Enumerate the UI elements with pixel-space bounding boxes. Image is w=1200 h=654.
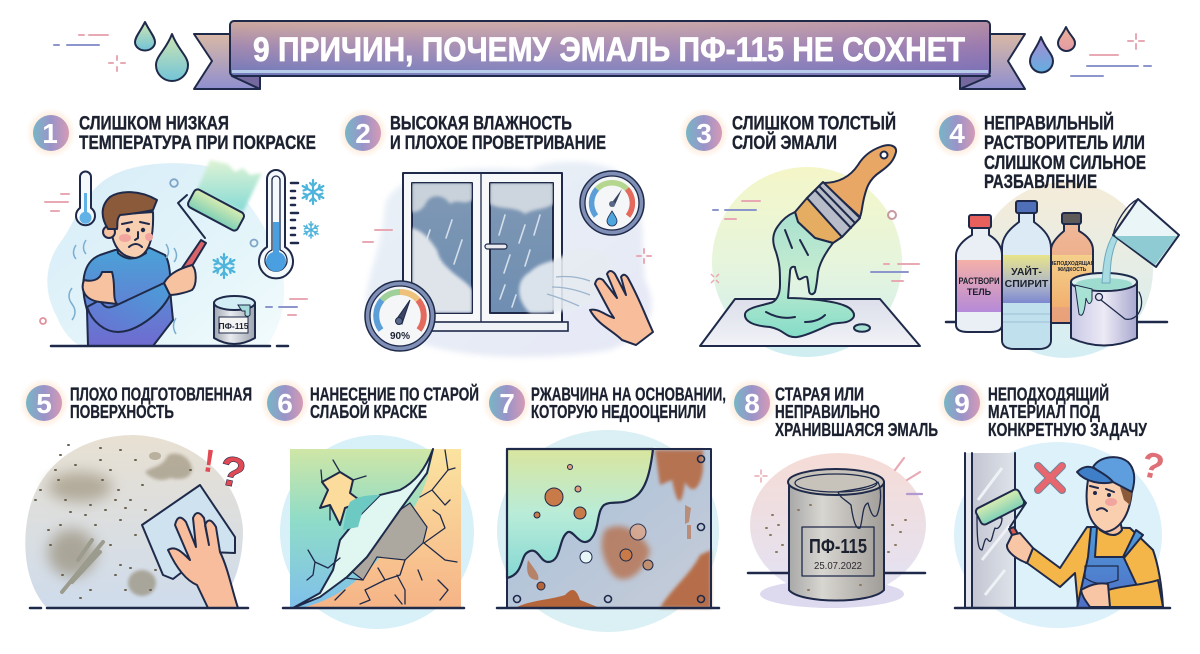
paint can ПФ-115: ПФ-115: [219, 321, 249, 331]
torso: [83, 248, 173, 346]
shadow ellipse: [760, 580, 904, 608]
hand wiping: [168, 513, 238, 608]
window handle: [485, 244, 507, 249]
paint can ПФ-115 old: 25.07.2022: [814, 561, 862, 572]
brush handle: [823, 145, 896, 217]
reason 8: [727, 378, 938, 608]
paint can ПФ-115 old: ПФ-115: [809, 536, 867, 558]
heading 2: [390, 114, 606, 154]
red cross: [1038, 466, 1062, 490]
number badge 4: 4: [949, 118, 965, 149]
paint smear: [977, 516, 1002, 550]
reason 6: [260, 378, 479, 629]
hygrometer 90%: 90%: [390, 331, 410, 342]
question mark: ?: [215, 446, 250, 497]
heading 8: ХРАНИВШАЯСЯ ЭМАЛЬ: [775, 420, 938, 440]
steam cloud: [519, 249, 611, 313]
background circle 3: [712, 167, 902, 357]
crossed arm: [87, 283, 170, 332]
peeled curl: [293, 449, 433, 608]
banner right tail: [960, 34, 1025, 89]
heading 7: РЖАВЧИНА НА ОСНОВАНИИ,: [531, 384, 726, 404]
exposed old paint: [300, 449, 461, 608]
number badge 7: 7: [499, 388, 515, 419]
reason 3: [679, 108, 920, 357]
decorative dashes: [711, 201, 919, 283]
title text: 9 ПРИЧИН, ПОЧЕМУ ЭМАЛЬ ПФ-115 НЕ СОХНЕТ: [253, 31, 965, 69]
worker hand on belly: [1081, 583, 1110, 607]
reason 5: [19, 378, 252, 608]
number badge 2: [338, 108, 388, 158]
decoration: left drops and dashes: [54, 22, 188, 81]
reason 7: [482, 378, 726, 632]
bottle: неподходящая жидкость: [1050, 213, 1095, 323]
ground line: [955, 607, 1170, 609]
hand: [590, 271, 653, 345]
background blob 1: [47, 163, 284, 346]
decoration dashes: [363, 230, 392, 242]
heading 9: КОНКРЕТНУЮ ЗАДАЧУ: [988, 420, 1148, 440]
window frame: [965, 453, 1015, 608]
painted panel: [290, 449, 461, 608]
reason 9: [937, 378, 1170, 628]
reason 4: [932, 108, 1179, 358]
rag: [142, 485, 235, 579]
number badge 6: 6: [277, 388, 293, 419]
heading 7: КОТОРУЮ НЕДООЦЕНИЛИ: [531, 402, 706, 422]
heading 5: ПЛОХО ПОДГОТОВЛЕННАЯ: [70, 384, 252, 404]
painted strip: [197, 160, 262, 212]
rust bubbles: [534, 464, 653, 590]
icon: large thermometer: [259, 170, 298, 278]
rust speckles: [766, 505, 906, 590]
paint flow and puddle: [745, 212, 870, 337]
hand on shoulder: [83, 272, 117, 304]
flake hole and cracks: [307, 450, 457, 604]
pouring stream: [1102, 235, 1118, 283]
beaker: [1113, 199, 1179, 267]
paint pail: [1071, 273, 1142, 346]
bottle: растворитель: ТЕЛЬ: [967, 287, 992, 297]
background cloud blob: [366, 162, 652, 357]
banner left tail: [194, 34, 260, 89]
title banner: [194, 21, 1025, 89]
background circle 7: [497, 430, 719, 632]
ferrule: [807, 182, 860, 237]
heading 8: НЕПРАВИЛЬНО: [775, 402, 880, 422]
paint can ПФ-115 old: [788, 469, 884, 600]
bottle: уайт-спирит: СПИРИТ: [1005, 278, 1049, 290]
number badge 1: [26, 108, 76, 158]
gauge with drop: [580, 171, 644, 235]
ground line: [283, 607, 464, 609]
heading 8: [775, 384, 938, 440]
rusty metal panel: [507, 449, 711, 608]
number badge 2: 2: [355, 118, 371, 149]
heading 1: [79, 114, 316, 154]
number badge 3: 3: [696, 118, 712, 149]
heading 4: РАСТВОРИТЕЛЬ ИЛИ: [984, 133, 1145, 154]
question mark: [201, 442, 250, 497]
rivets: [514, 456, 704, 602]
ground line: [497, 607, 719, 609]
bottle: уайт-спирит: УАЙТ-: [1011, 265, 1042, 278]
banner left fold: [232, 76, 260, 89]
question mark: ?: [1138, 443, 1168, 488]
paint brush: [795, 145, 896, 243]
bottle: уайт-спирит: [1002, 201, 1051, 349]
hair: [103, 192, 157, 229]
reason 2: [338, 108, 653, 357]
decorative dashes: [45, 194, 69, 202]
heading 7: [531, 384, 726, 422]
background circle 4: [977, 182, 1153, 358]
background circle 6: [280, 435, 474, 629]
heading 8: СТАРАЯ ИЛИ: [775, 384, 864, 404]
heading 6: [310, 384, 479, 422]
heading 2: ВЫСОКАЯ ВЛАЖНОСТЬ: [390, 114, 572, 134]
person shivering: [69, 192, 196, 346]
rust patches: [515, 450, 711, 608]
dirt stains: [35, 445, 192, 598]
heading 5: ПОВЕРХНОСТЬ: [70, 402, 174, 422]
panel outline: [507, 449, 711, 608]
heading 1: ТЕМПЕРАТУРА ПРИ ПОКРАСКЕ: [79, 133, 316, 154]
heading 6: СЛАБОЙ КРАСКЕ: [310, 401, 427, 422]
can label: [802, 527, 874, 576]
dirty wall circle: [25, 435, 243, 608]
forearm: [1105, 580, 1163, 607]
number badge 4: [932, 108, 982, 158]
rain: [424, 215, 540, 307]
heading 4: СЛИШКОМ СИЛЬНОЕ: [984, 153, 1146, 174]
bristles: [795, 198, 842, 243]
decoration: right drops and dashes: [1030, 27, 1151, 76]
icon: snowflakes: [214, 180, 323, 278]
worker cap: [1093, 457, 1134, 492]
bottle: растворитель: РАСТВОРИ: [958, 276, 1000, 286]
heading 4: НЕПРАВИЛЬНЫЙ: [984, 112, 1114, 134]
paint can ПФ-115: [214, 296, 255, 344]
heading 5: [70, 384, 252, 422]
heading 2: И ПЛОХОЕ ПРОВЕТРИВАНИЕ: [390, 133, 606, 154]
number badge 9: [937, 378, 987, 428]
background ellipse 9: [954, 442, 1162, 628]
number badge 6: [260, 378, 310, 428]
neck and head: [117, 240, 146, 258]
worker neck: [1097, 520, 1122, 535]
ground line: [946, 321, 1167, 323]
paint roller: [178, 188, 245, 271]
heading 3: [732, 112, 896, 154]
number badge 5: 5: [36, 388, 52, 419]
roller: [975, 488, 1032, 563]
warning marks: [755, 458, 922, 494]
bottle: растворитель: [956, 215, 1002, 332]
icon: small thermometer: [76, 172, 95, 225]
reason 1: [26, 108, 323, 346]
heading 3: СЛОЙ ЭМАЛИ: [732, 132, 837, 154]
worker: [1007, 457, 1163, 608]
heading 9: НЕПОДХОДЯЩИЙ: [988, 384, 1109, 404]
number badge 8: 8: [744, 388, 760, 419]
heading 9: МАТЕРИАЛ ПОД: [988, 402, 1100, 422]
ground line: [51, 345, 288, 347]
shirt and arm: [1027, 527, 1163, 607]
ground line: [30, 607, 248, 609]
number badge 9: 9: [954, 388, 970, 419]
dripping old paint: [838, 482, 881, 528]
number badge 8: [727, 378, 777, 428]
banner ribbon: [230, 21, 990, 76]
heading 1: СЛИШКОМ НИЗКАЯ: [79, 114, 229, 134]
table sheet: [700, 299, 920, 346]
hygrometer 90%: [365, 281, 435, 351]
banner right fold: [960, 76, 990, 89]
heading 9: [988, 384, 1148, 440]
hand on roller: [164, 265, 196, 295]
heading 4: РАЗБАВЛЕНИЕ: [984, 172, 1097, 193]
storm clouds: [412, 183, 472, 313]
heading 3: СЛИШКОМ ТОЛСТЫЙ: [732, 112, 896, 134]
number badge 3: [679, 108, 729, 158]
worker head: [1087, 480, 1132, 532]
paint area with wavy edge: [507, 449, 653, 578]
overalls: [1077, 527, 1143, 608]
heading 4: [984, 112, 1146, 193]
background ellipse 8: [750, 453, 926, 597]
heading 6: НАНЕСЕНИЕ ПО СТАРОЙ: [310, 384, 479, 404]
number badge 7: [482, 378, 532, 428]
worker hand on roller: [1007, 533, 1033, 563]
bottle: неподходящая жидкость: ЖИДКОСТЬ: [1057, 267, 1087, 273]
window: [403, 173, 568, 331]
number badge 1: 1: [42, 118, 58, 149]
bottle: неподходящая жидкость: НЕПОДХОДЯЩАЯ: [1050, 261, 1095, 267]
number badge 5: [19, 378, 69, 428]
small circles: [40, 179, 258, 324]
exposed grey base: [347, 503, 427, 580]
ground line: [748, 572, 925, 574]
question mark: !: [201, 442, 217, 479]
window sill: [428, 322, 568, 331]
